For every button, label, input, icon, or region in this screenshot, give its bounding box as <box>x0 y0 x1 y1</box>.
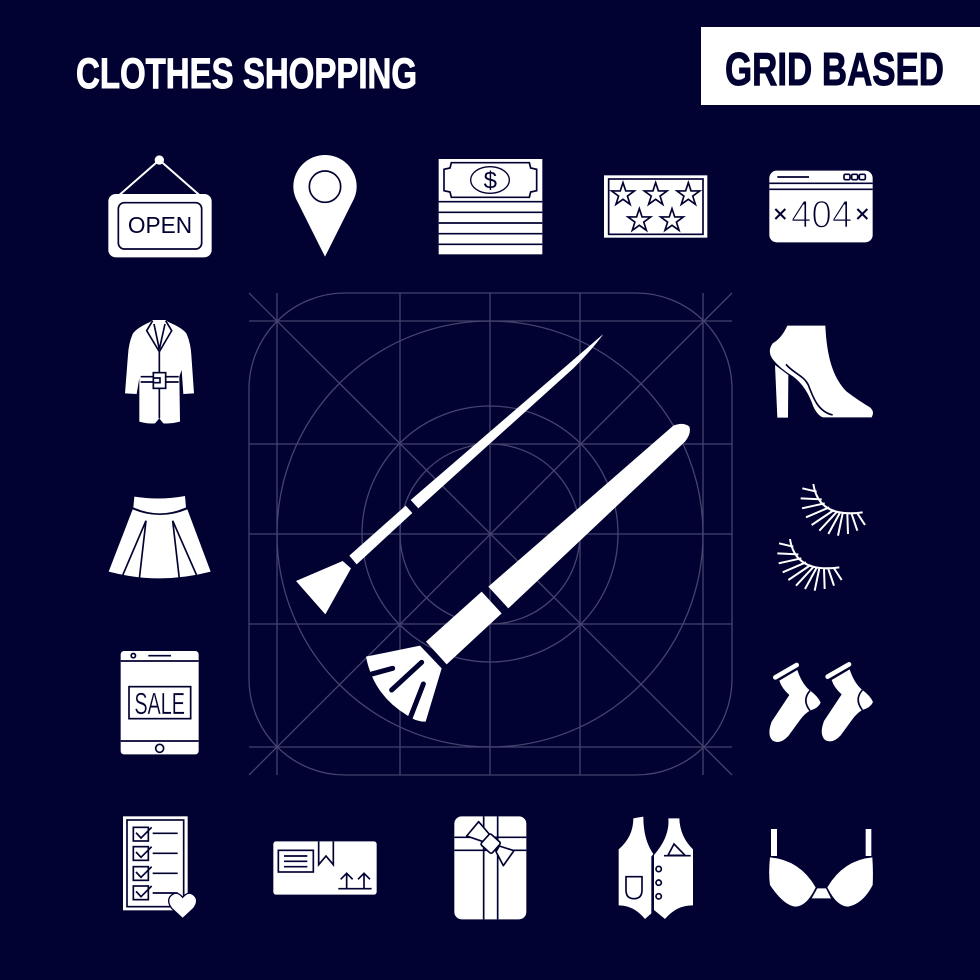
icon: open sign <box>108 155 212 257</box>
icon: 404 browser window <box>769 171 873 242</box>
icon: wishlist checklist <box>123 816 197 919</box>
title: CLOTHES SHOPPING <box>76 50 417 98</box>
left sock <box>769 665 821 742</box>
icon: makeup brushes <box>296 334 690 722</box>
icon: socks <box>769 664 873 742</box>
icon: eyelashes <box>777 484 865 591</box>
large brush <box>366 424 690 722</box>
icon: ankle boot <box>770 326 873 418</box>
icon: star rating card <box>604 175 707 238</box>
icon: tablet sale <box>121 651 199 754</box>
icon: waistcoat <box>619 817 693 919</box>
icon: money stack: $ <box>484 168 497 195</box>
icon: money stack <box>439 159 542 254</box>
right sock <box>822 664 873 741</box>
icon: tablet sale: SALE <box>134 687 185 721</box>
thin brush <box>296 334 603 614</box>
icon: skirt <box>109 496 211 579</box>
icon: parcel box <box>273 841 377 895</box>
upper eyelash <box>801 484 865 536</box>
badge: grid based <box>701 27 980 105</box>
lower eyelash <box>777 539 842 591</box>
icon: open sign: OPEN <box>128 212 192 238</box>
icon: location pin <box>293 155 357 257</box>
icon: bra <box>769 829 873 907</box>
construction grid <box>249 293 732 775</box>
icon: gift box <box>454 816 526 919</box>
icon: 404 browser window: 404 <box>791 193 852 237</box>
icon: coat <box>125 320 194 423</box>
